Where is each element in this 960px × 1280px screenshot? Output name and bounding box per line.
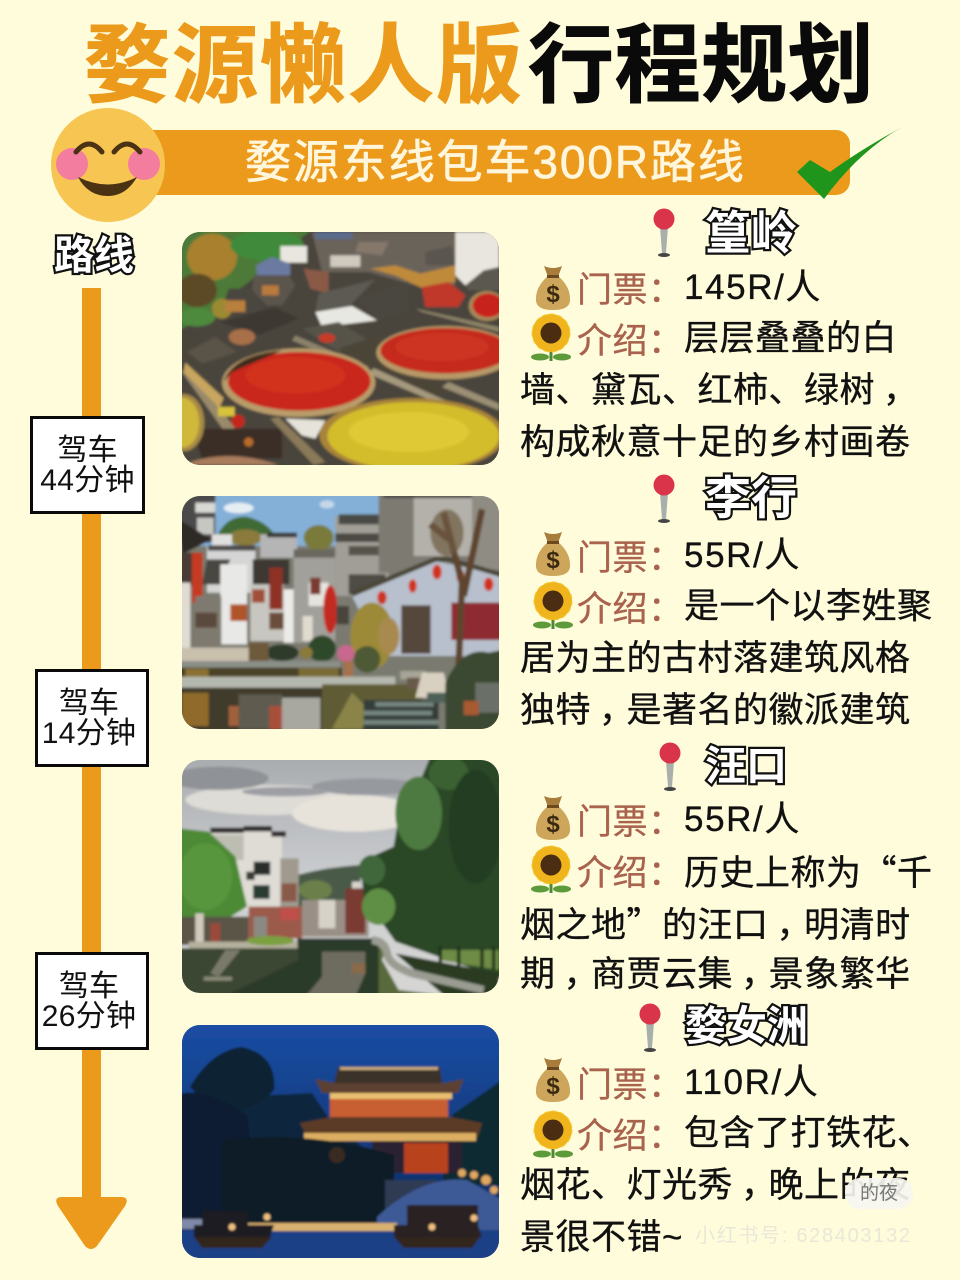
icon: pin xyxy=(640,1004,660,1052)
icon: green check mark xyxy=(797,127,902,199)
icon: money bag: $ xyxy=(546,547,560,574)
place name: 婺女洲 xyxy=(685,1003,808,1049)
price value: 55R/人 xyxy=(684,800,801,839)
intro text xyxy=(520,581,933,730)
ticket price: 门票： xyxy=(577,530,684,581)
icon: money bag xyxy=(536,266,570,310)
drive time: 44 minutes: 44分钟 xyxy=(40,464,135,497)
icon: pin xyxy=(660,742,680,791)
photo: Wangkou river xyxy=(182,760,499,993)
photo: Lixing village xyxy=(182,496,499,729)
text: 烟之地”的汪口，明清时 xyxy=(520,897,911,948)
photo: Huangling drying baskets xyxy=(182,232,499,465)
place name: 李行 xyxy=(705,472,797,524)
drive time: 14 minutes: 14分钟 xyxy=(42,717,136,750)
text: 介绍： xyxy=(577,1108,684,1159)
intro text xyxy=(520,845,933,994)
section: Wangkou xyxy=(520,742,933,994)
price value: 110R/人 xyxy=(684,1063,819,1102)
section: Huangling xyxy=(520,206,919,462)
icon: money bag xyxy=(536,796,570,840)
text: 墙、黛瓦、红柿、绿树， xyxy=(520,371,919,410)
section: Wunv island xyxy=(520,1002,933,1257)
text: 介绍： xyxy=(577,313,684,364)
icon: money bag xyxy=(536,1058,570,1102)
text: 居为主的古村落建筑风格 xyxy=(520,639,911,678)
text: 独特，是著名的徽派建筑 xyxy=(520,691,911,730)
text: 历史上称为“千 xyxy=(684,845,933,896)
section: Lixing xyxy=(520,472,933,730)
text: 是一个以李姓聚 xyxy=(684,587,933,626)
drive time: 14 minutes: 驾车 xyxy=(59,687,119,720)
ticket price: 门票： xyxy=(577,794,684,845)
text: 烟花、灯光秀，晚上的夜 xyxy=(520,1166,911,1205)
text: 介绍： xyxy=(577,581,684,632)
icon: money bag: $ xyxy=(546,281,560,308)
text: 构成秋意十足的乡村画卷 xyxy=(520,423,911,462)
icon: sunflower xyxy=(531,846,571,893)
intro text xyxy=(520,1108,933,1257)
watermark badge xyxy=(845,1178,913,1209)
icon: sunflower xyxy=(533,1110,573,1158)
photo: Wunv island at night xyxy=(182,1025,499,1258)
drive time: 14 minutes xyxy=(35,669,149,767)
place name: 汪口 xyxy=(705,743,787,789)
icon: pin xyxy=(654,208,674,257)
intro text xyxy=(520,313,919,462)
route label: 路线 xyxy=(54,234,134,278)
icon: sunflower xyxy=(531,314,571,361)
price value: 145R/人 xyxy=(684,268,822,307)
drive time: 44 minutes xyxy=(30,416,145,514)
watermark badge: 的夜 xyxy=(860,1183,898,1204)
banner text: 婺源东线包车300R路线 xyxy=(245,136,746,188)
text: 层层叠叠的白 xyxy=(684,319,897,358)
ticket price: 门票： xyxy=(577,262,684,313)
price value: 55R/人 xyxy=(684,536,801,575)
banner: route subtitle xyxy=(130,130,850,195)
text: 景很不错~ xyxy=(520,1218,683,1257)
icon: pin xyxy=(654,474,674,523)
icon: money bag: $ xyxy=(546,811,560,838)
text: 期，商贾云集，景象繁华 xyxy=(520,955,911,994)
title: 婺源懒人版行程规划 xyxy=(84,18,874,114)
icon: money bag xyxy=(536,532,570,576)
ticket price: 门票： xyxy=(577,1057,684,1108)
place name: 篁岭 xyxy=(705,207,797,259)
icon: smiling face xyxy=(51,108,165,222)
drive time: 26 minutes xyxy=(35,952,149,1050)
drive time: 44 minutes: 驾车 xyxy=(57,434,118,467)
drive time: 26 minutes: 驾车 xyxy=(59,970,119,1003)
text: 包含了打铁花、 xyxy=(684,1114,933,1153)
route arrow xyxy=(56,288,127,1249)
icon: sunflower xyxy=(533,582,573,629)
text: 介绍： xyxy=(577,845,684,896)
watermark id: 小红书号: 628403132 xyxy=(695,1225,912,1247)
drive time: 26 minutes: 26分钟 xyxy=(42,1000,136,1033)
icon: money bag: $ xyxy=(546,1073,560,1100)
